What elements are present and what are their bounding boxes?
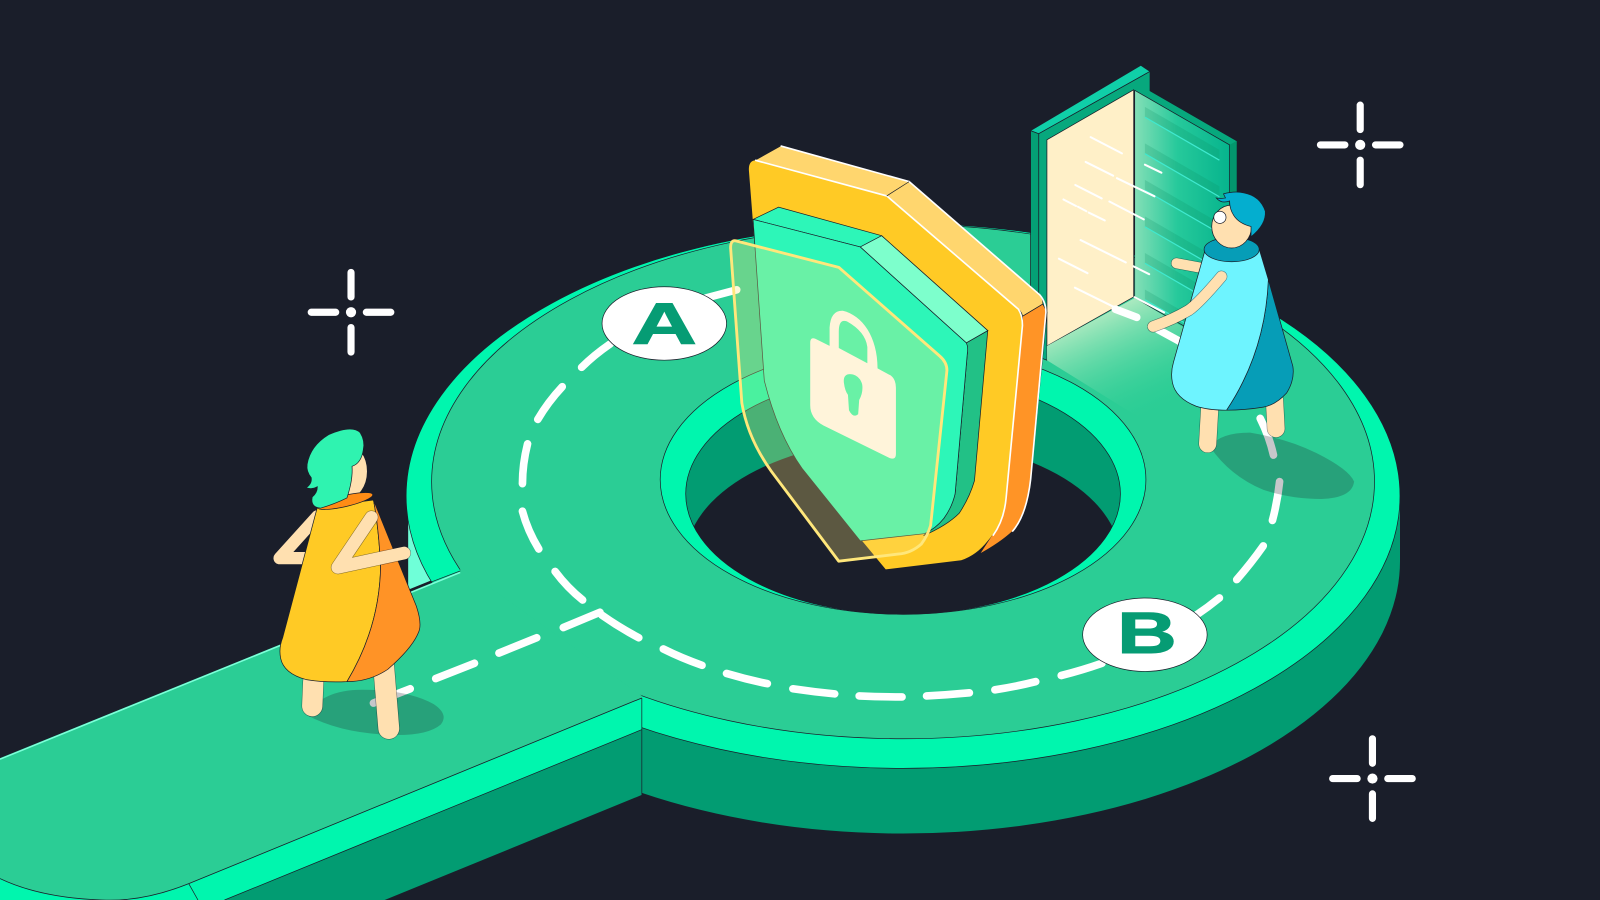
right person back arm — [1177, 263, 1204, 268]
right person hair — [1216, 192, 1265, 237]
left person legs — [312, 666, 389, 729]
shield back layer side — [980, 304, 1047, 554]
sparkle: top right — [1320, 105, 1400, 185]
central hole — [660, 368, 1146, 615]
left person dress — [280, 500, 381, 682]
left person collar — [316, 489, 374, 513]
person right — [1153, 192, 1354, 499]
right person eye — [1214, 211, 1226, 223]
icon: padlock — [810, 311, 896, 459]
platform top face — [0, 224, 1374, 900]
server panel — [1135, 90, 1230, 352]
shield white highlights — [755, 146, 1046, 536]
right person front arm — [1153, 277, 1221, 327]
mint inner wall sliver — [408, 510, 441, 590]
left person face — [327, 444, 367, 499]
door cream panel — [1047, 90, 1134, 346]
left person hair — [306, 429, 364, 508]
label A: A — [632, 292, 697, 357]
left person back arm — [280, 516, 317, 558]
platform bright rim — [0, 223, 1400, 900]
floor light — [1047, 298, 1214, 459]
glass shield — [731, 241, 947, 561]
label A — [602, 287, 727, 360]
door left outer frame — [1031, 131, 1039, 359]
shield green layer bevel — [753, 207, 988, 343]
left person shadow — [307, 690, 444, 735]
shield back layer face — [749, 160, 1022, 569]
door top ridge — [1031, 65, 1150, 134]
right person face — [1212, 205, 1252, 248]
shield — [731, 146, 1047, 569]
data door — [1031, 65, 1237, 459]
shield green light bevel — [860, 236, 988, 343]
right person legs — [1208, 400, 1276, 444]
right person dress shade — [1227, 280, 1293, 410]
left person front arm — [338, 517, 404, 567]
label B: B — [1117, 601, 1177, 666]
light streaks — [1059, 137, 1164, 312]
shield bevel divider — [887, 182, 909, 196]
door dashes — [1115, 309, 1181, 342]
platform dark side wall — [224, 496, 1400, 900]
shield back layer top bevel — [755, 146, 1043, 316]
sparkle: left — [311, 272, 391, 352]
platform: ring with handle — [0, 223, 1400, 900]
label B — [1083, 598, 1207, 671]
door front frame — [1039, 71, 1237, 360]
shield green layer side — [923, 331, 988, 536]
door right edge — [1230, 141, 1237, 306]
shield green layer face — [753, 219, 968, 541]
dashed route — [373, 290, 1280, 703]
right person shadow — [1210, 433, 1354, 499]
right person dress — [1172, 249, 1268, 410]
left person dress shade — [347, 500, 420, 682]
right person collar — [1204, 237, 1259, 262]
person left — [280, 429, 444, 735]
sparkle: bottom right — [1333, 739, 1412, 818]
